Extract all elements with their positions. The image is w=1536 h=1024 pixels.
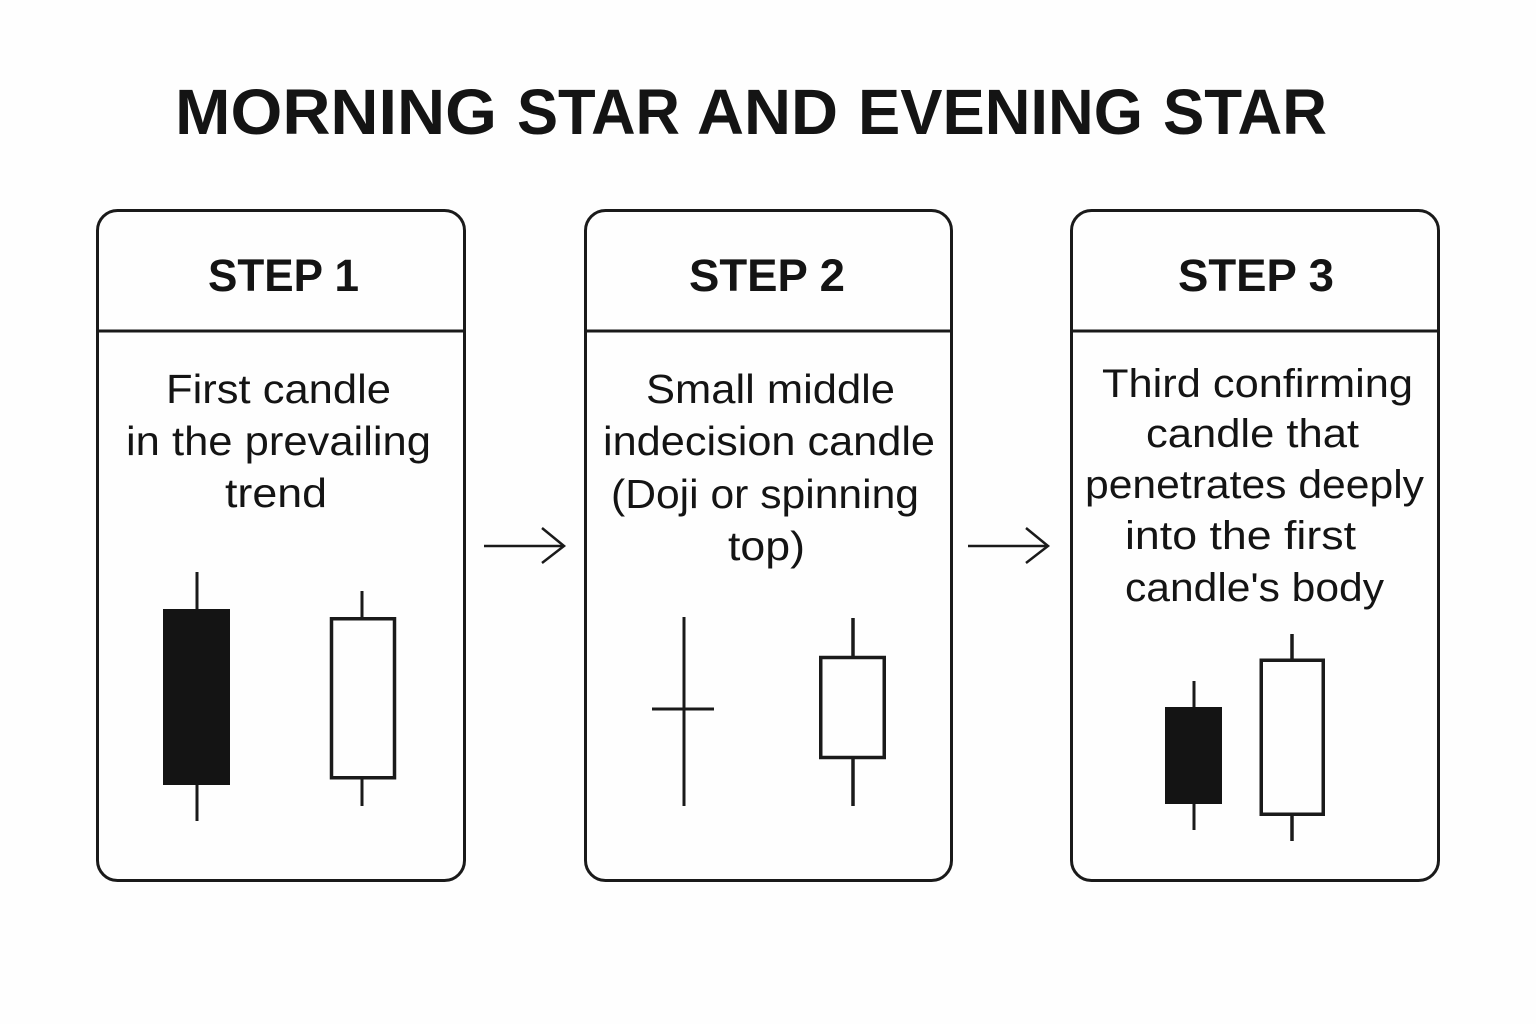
text: step 1 description: trend (225, 470, 327, 516)
heading: step 2: STEP 2 (689, 250, 845, 301)
text: step 1 description: in the prevailing (126, 418, 431, 464)
text: step 2 description: Small middle (646, 366, 895, 412)
title: STAR (1163, 76, 1327, 148)
title: EVENING (858, 76, 1143, 148)
heading: step 1: STEP 1 (208, 250, 359, 301)
text: step 3 description: Third confirming (1102, 362, 1413, 406)
title: AND (697, 76, 838, 148)
title (175, 76, 1327, 148)
text: step 3 description: into the first (1125, 514, 1356, 558)
candle: spinning top (821, 618, 884, 806)
candle: doji (652, 617, 714, 806)
text: step 2 description: top) (728, 523, 805, 569)
title: MORNING (175, 76, 497, 148)
candle: small black (1165, 681, 1222, 830)
candle: black (163, 572, 230, 821)
panel: step 2 (586, 210, 952, 880)
text: step 1 description (126, 366, 431, 516)
text: step 3 description: penetrates deeply (1085, 463, 1424, 507)
arrow: step 2 to step 3 (968, 528, 1048, 563)
title: STAR (517, 76, 680, 148)
text: step 1 description: First candle (166, 366, 391, 412)
panel: step 1 (98, 210, 464, 880)
candle: white (332, 591, 394, 806)
text: step 2 description (603, 366, 935, 569)
arrow: step 1 to step 2 (484, 528, 564, 563)
text: step 2 description: (Doji or spinning (611, 471, 919, 517)
text: step 2 description: indecision candle (603, 418, 935, 464)
text: step 3 description (1085, 362, 1424, 610)
panel: step 3 (1072, 210, 1438, 880)
text: step 3 description: candle that (1146, 412, 1359, 456)
text: step 3 description: candle's body (1125, 566, 1384, 610)
heading: step 3: STEP 3 (1178, 250, 1334, 301)
candle: tall white (1261, 634, 1323, 841)
